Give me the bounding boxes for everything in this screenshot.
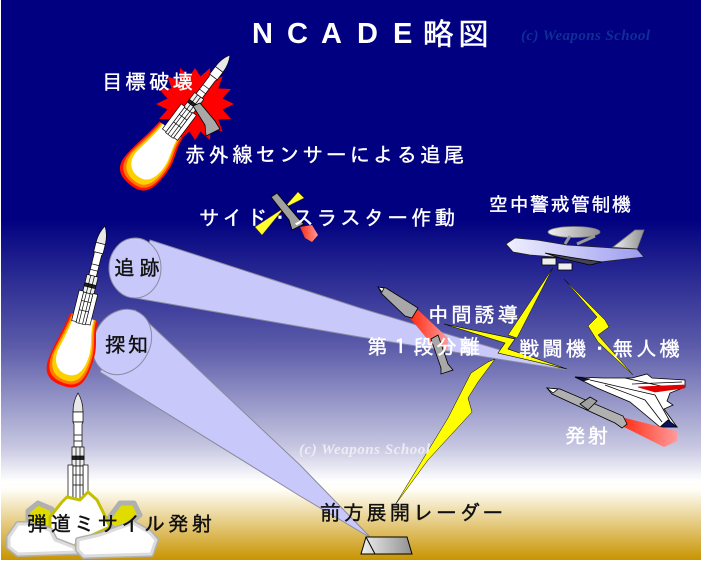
title	[252, 18, 489, 50]
fuselage	[506, 238, 644, 262]
label: fighter and UAV: 戦闘機・無人機	[519, 338, 680, 359]
label: detection: 探知	[105, 334, 148, 355]
right puff halo	[78, 523, 156, 556]
label: midcourse guidance: 中間誘導	[428, 304, 518, 325]
watermark top: (c) Weapons School	[521, 28, 651, 44]
title: NCADE	[252, 18, 412, 50]
midcourse guidance bolt	[444, 324, 567, 369]
watermark lower: (c) Weapons School	[299, 442, 431, 458]
left puff halo	[9, 524, 77, 554]
launched missile	[547, 388, 627, 428]
wing	[545, 253, 602, 265]
label: target destroyed: 目標破壊	[102, 71, 193, 92]
datalink bolt AWACS to fighter	[564, 279, 633, 375]
label: forward deployed radar: 前方展開レーダー	[320, 502, 503, 523]
detection beam	[81, 299, 371, 538]
side thruster vehicle	[255, 192, 318, 242]
launch smoke cloud	[9, 492, 156, 556]
tail fin	[613, 230, 644, 249]
tracking sensor beam	[109, 238, 567, 370]
launching missile	[68, 393, 88, 499]
label: ballistic missile launch: 弾道ミサイル発射	[27, 513, 212, 534]
datalink bolt AWACS to radar	[395, 268, 553, 505]
destroyed missile exhaust flame	[113, 117, 188, 198]
title: 略図	[423, 18, 489, 49]
fighter aircraft	[575, 374, 685, 427]
label: side thruster: サイド・スラスター作動	[199, 208, 455, 228]
AWACS aircraft	[506, 226, 644, 270]
forward radar	[361, 537, 412, 554]
first stage separation missile	[378, 287, 453, 374]
interceptor second stage at impact	[193, 103, 220, 136]
central plume	[50, 492, 110, 550]
ascending missile	[71, 224, 114, 326]
label: AWACS: 空中警戒管制機	[489, 194, 631, 214]
label: first stage separation: 第１段分離	[367, 336, 480, 357]
explosion burst	[156, 68, 234, 140]
left puff	[9, 524, 77, 554]
radome	[548, 226, 600, 238]
launched missile flame	[620, 418, 677, 447]
ascending missile flame	[42, 311, 105, 392]
label: tracking: 追跡	[114, 257, 160, 278]
right puff	[78, 523, 156, 556]
label: infrared tracking: 赤外線センサーによる追尾	[185, 144, 464, 165]
destroyed missile	[162, 49, 238, 141]
engines	[542, 258, 556, 265]
yellow glow patches	[28, 503, 140, 532]
label: launch: 発射	[565, 425, 608, 446]
